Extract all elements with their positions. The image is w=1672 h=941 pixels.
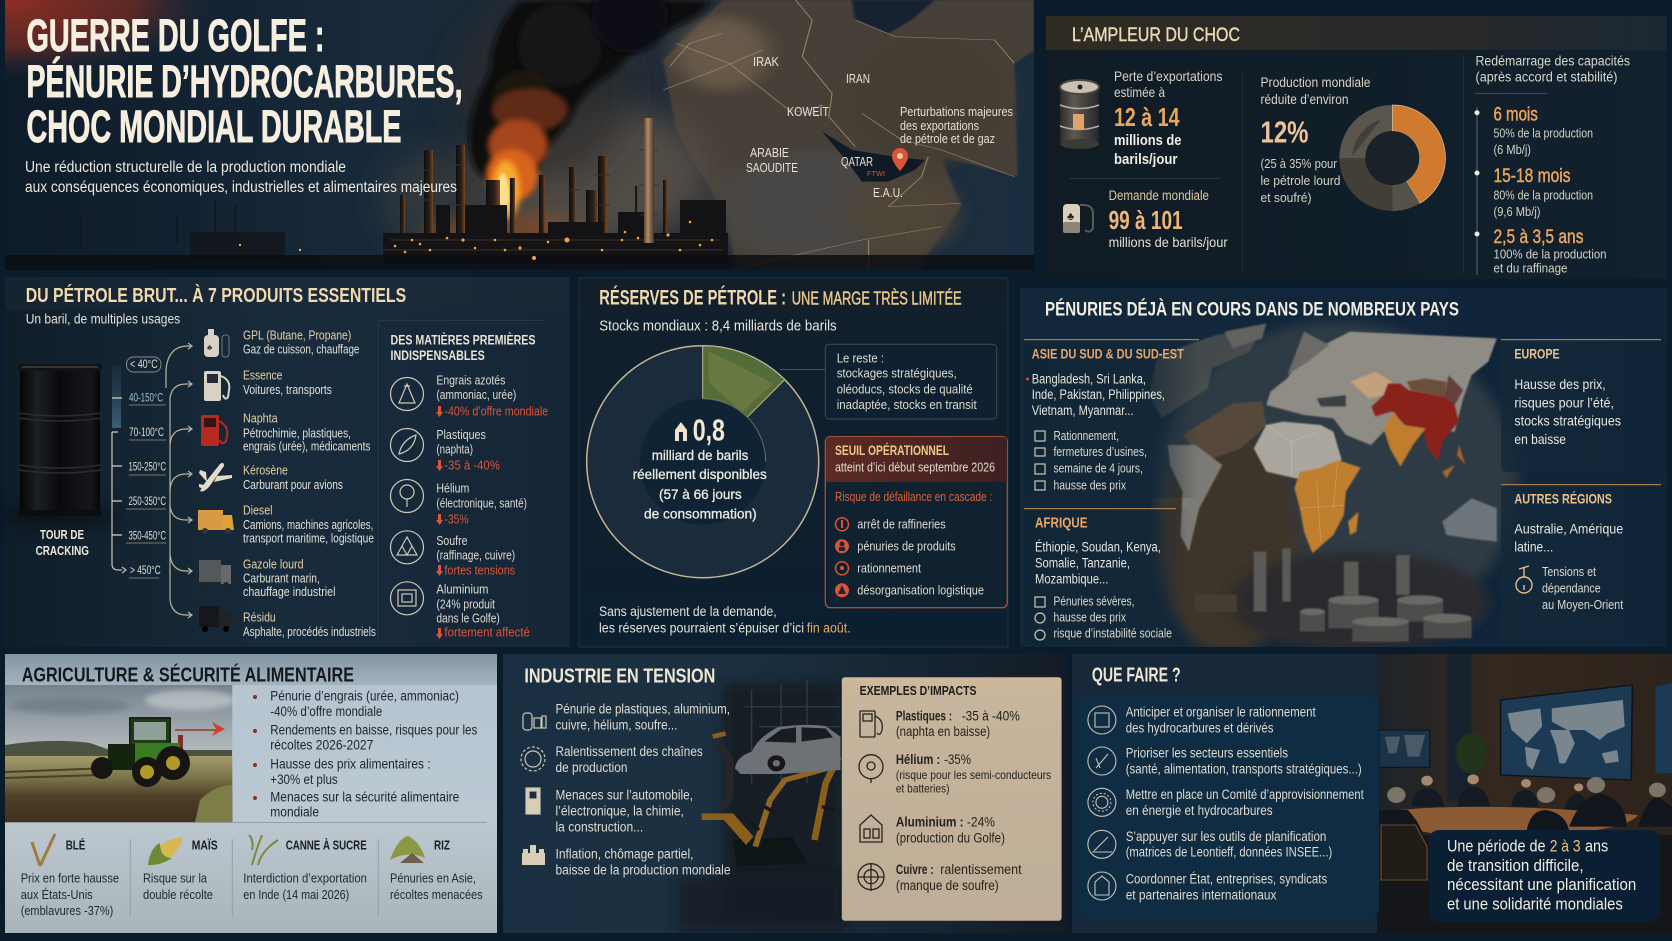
product list: Résidu	[243, 611, 276, 625]
map callout	[900, 105, 1013, 146]
center value: 0,8	[693, 413, 725, 448]
industry list	[556, 701, 730, 877]
impact list: ralentissement	[940, 862, 1022, 877]
region: asie: Inde, Pakistan, Philippines,	[1032, 387, 1165, 402]
action list: en énergie et hydrocarbures	[1126, 803, 1273, 818]
industry list: Pénurie de plastiques, aluminium,	[556, 701, 730, 716]
callout: période de transition: ans	[1585, 838, 1608, 856]
product list: Naphta	[243, 412, 278, 426]
heading: DU PÉTROLE BRUT... À 7 PRODUITS ESSENTIELS	[26, 284, 406, 307]
product list: Voitures, transports	[243, 383, 332, 397]
impact list: (naphta en baisse)	[896, 724, 990, 739]
region: autres régions: Australie, Amérique	[1514, 520, 1623, 536]
heading: QUE FAIRE ?	[1092, 665, 1181, 687]
industry icons	[521, 713, 546, 865]
action list: et partenaires internationaux	[1126, 887, 1277, 902]
panel: du pétrole brut	[0, 277, 570, 647]
crop: canne à sucre: en Inde (14 mai 2026)	[243, 888, 349, 902]
world output: le pétrole lourd	[1260, 173, 1340, 188]
heading: RÉSERVES DE PÉTROLE :	[599, 286, 786, 309]
region: europe	[1501, 339, 1667, 472]
product list: Camions, machines agricoles,	[243, 518, 373, 532]
consequences list: +30% et plus	[270, 772, 338, 787]
product list	[243, 328, 376, 639]
crop: blé: aux États-Unis	[21, 887, 93, 902]
raw material list: Plastiques	[436, 428, 486, 442]
center value: de consommation)	[644, 505, 757, 521]
callout: seuil opérationnel	[825, 437, 1007, 608]
action list: Mettre en place un Comité d’approvisionnement	[1126, 787, 1364, 802]
title: CHOC MONDIAL DURABLE	[26, 101, 402, 152]
action list box	[1075, 697, 1379, 918]
raw material list: (ammoniac, urée)	[436, 388, 516, 402]
impact icons	[858, 711, 884, 891]
icon: naphta red pump	[201, 415, 227, 446]
callout: seuil opérationnel: rationnement	[857, 560, 921, 575]
region: asie: Vietnam, Myanmar...	[1032, 403, 1134, 418]
subtitle: Une réduction structurelle de la production mondiale	[25, 159, 346, 176]
product list: chauffage industriel	[243, 585, 336, 599]
map of the Gulf	[663, 0, 1034, 271]
impact list: Plastiques :	[896, 709, 952, 724]
restart timeline: (après accord et stabilité)	[1476, 70, 1618, 85]
export loss figures: 12 à 14	[1114, 102, 1180, 132]
region: europe: stocks stratégiques	[1514, 413, 1621, 429]
consequences list: -40% d’offre mondiale	[270, 704, 382, 719]
temperature scale: < 40°C	[130, 359, 158, 371]
impact list: -35 à -40%	[962, 709, 1020, 724]
consequences list: Menaces sur la sécurité alimentaire	[270, 790, 459, 805]
region: asie: ASIE DU SUD & DU SUD-EST	[1032, 345, 1184, 361]
impact list: (production du Golfe)	[896, 831, 1005, 846]
region: autres régions: latine...	[1514, 539, 1553, 555]
raw material list: Soufre	[436, 534, 468, 548]
panel: que faire	[1072, 654, 1672, 935]
temperature scale: 70-100°C	[129, 427, 164, 439]
product list: Pétrochimie, plastiques,	[243, 426, 351, 440]
action list: S’appuyer sur les outils de planification	[1126, 829, 1326, 844]
impact examples box: EXEMPLES D’IMPACTS	[860, 683, 977, 698]
map callout: des exportations	[900, 119, 979, 133]
region: autres régions: AUTRES RÉGIONS	[1514, 490, 1612, 506]
industry list: de production	[556, 760, 628, 775]
export loss figures	[1114, 68, 1222, 168]
center value: réellement disponibles	[633, 466, 767, 482]
tower label: CRACKING	[36, 543, 89, 558]
product list: Gaz de cuisson, chauffage	[243, 342, 359, 356]
consequences list: récoltes 2026-2027	[270, 737, 373, 752]
region: europe: Hausse des prix,	[1514, 376, 1606, 392]
region: afrique: Pénuries sévères,	[1054, 595, 1134, 609]
subtitle: aux conséquences économiques, industrielles et alimentaires majeures	[25, 179, 457, 196]
callout: le reste: oléoducs, stocks de qualité	[837, 381, 973, 396]
icon: black truck	[199, 606, 231, 632]
product arrows	[166, 343, 192, 618]
risk icons	[835, 518, 849, 597]
product list: GPL (Butane, Propane)	[243, 328, 351, 342]
action list: des hydrocarbures et dérivés	[1126, 721, 1274, 736]
world output: (25 à 35% pour	[1260, 156, 1338, 171]
restart timeline: 100% de la production	[1494, 247, 1607, 261]
impact list: (risque pour les semi-conducteurs	[896, 768, 1051, 782]
temperature scale: 350-450°C	[128, 530, 166, 542]
red impact figures: -40% d’offre mondiale	[444, 405, 548, 419]
crop: maïs: Risque sur la	[143, 872, 207, 886]
red impact figures: -35%	[444, 513, 469, 527]
industry list: l’électronique, la chimie,	[556, 803, 684, 818]
restart timeline: Redémarrage des capacités	[1476, 54, 1630, 69]
country labels: ARABIE	[750, 146, 789, 160]
country labels: E.A.U.	[873, 186, 903, 200]
heading: INDUSTRIE EN TENSION	[524, 665, 715, 687]
raw materials heading	[390, 332, 536, 363]
product icons	[198, 329, 234, 632]
raw material list: Engrais azotés	[436, 373, 505, 387]
restart timeline: 50% de la production	[1494, 127, 1593, 141]
heading: L’AMPLEUR DU CHOC	[1072, 25, 1240, 46]
industry list: Ralentissement des chaînes	[556, 744, 703, 759]
restart timeline: 15-18 mois	[1494, 166, 1570, 187]
panel: agriculture	[5, 654, 497, 933]
callout: le reste	[825, 344, 997, 419]
heading: AGRICULTURE & SÉCURITÉ ALIMENTAIRE	[22, 664, 354, 687]
industry list: la construction...	[556, 819, 643, 834]
callout: période de transition: Une période de	[1447, 838, 1546, 856]
tower label: TOUR DE	[40, 527, 84, 542]
impact list: -35%	[944, 752, 971, 767]
callout: seuil opérationnel: pénuries de produits	[857, 539, 956, 554]
world output: et soufré)	[1260, 190, 1312, 205]
export loss figures: millions de	[1114, 132, 1182, 149]
region: afrique: hausse des prix	[1054, 611, 1127, 625]
country labels: SAOUDITE	[746, 161, 798, 175]
callout: seuil opérationnel: arrêt de raffineries	[857, 516, 946, 531]
action list: Anticiper et organiser le rationnement	[1126, 705, 1316, 720]
callout: seuil opérationnel: désorganisation logistique	[857, 582, 984, 597]
conclusion: Sans ajustement de la demande,	[599, 604, 777, 619]
subtitle	[25, 159, 457, 196]
region: asie: Bangladesh, Sri Lanka,	[1032, 371, 1146, 386]
region: asie: fermetures d’usines,	[1054, 445, 1147, 459]
raw material list	[436, 373, 527, 625]
raw material list: (raffinage, cuivre)	[436, 548, 515, 562]
region: europe: en baisse	[1514, 431, 1566, 447]
temperature scale: 250-350°C	[128, 496, 166, 508]
raw material list: (24% produit	[436, 597, 495, 611]
region: autres régions	[1501, 484, 1667, 646]
action icons	[1088, 706, 1116, 900]
callout: le reste: Le reste :	[837, 350, 884, 365]
center value	[633, 413, 767, 521]
industry list: baisse de la production mondiale	[556, 862, 730, 877]
refinery silhouette	[5, 118, 1034, 270]
industry list: cuivre, hélium, soufre...	[556, 717, 678, 732]
world output	[1260, 75, 1370, 205]
icon: fuel pump	[1063, 204, 1093, 233]
country labels: IRAN	[846, 72, 870, 86]
panel: hero banner	[5, 0, 1034, 271]
restart timeline: (9,6 Mb/j)	[1494, 205, 1540, 219]
heading: UNE MARGE TRÈS LIMITÉE	[792, 288, 962, 308]
raw materials heading: INDISPENSABLES	[390, 348, 485, 363]
product list: Essence	[243, 368, 282, 382]
region: autres régions: au Moyen-Orient	[1542, 598, 1624, 612]
action list	[1126, 705, 1364, 902]
callout: période de transition: 2 à 3	[1550, 838, 1580, 856]
panel: l'ampleur du choc	[1046, 16, 1667, 279]
country labels: KOWEÏT	[787, 105, 829, 119]
restart timeline: 2,5 à 3,5 ans	[1494, 227, 1584, 248]
crop: maïs: double récolte	[143, 888, 213, 902]
icon: grey truck	[199, 560, 231, 588]
heading: PÉNURIES DÉJÀ EN COURS DANS DE NOMBREUX PAYS	[1045, 298, 1459, 321]
title	[26, 10, 462, 152]
product list: transport maritime, logistique	[243, 532, 374, 546]
region: asie: hausse des prix	[1054, 478, 1127, 492]
temperature scale: 150-250°C	[128, 462, 166, 474]
panel: industrie en tension	[503, 654, 1067, 933]
center value: (57 à 66 jours	[659, 486, 742, 502]
icon: oil barrel	[1060, 80, 1099, 149]
callout: seuil opérationnel: SEUIL OPÉRATIONNEL	[835, 442, 949, 458]
action list: (matrices de Leontieff, données INSEE...)	[1126, 845, 1332, 860]
world output: 12%	[1260, 115, 1308, 150]
crop: riz: Pénuries en Asie,	[390, 872, 476, 886]
icon: plane	[199, 463, 232, 492]
action list: Prioriser les secteurs essentiels	[1126, 746, 1288, 761]
crop: blé: BLÉ	[66, 837, 85, 852]
crop: blé	[21, 834, 119, 918]
impact list: Aluminium :	[896, 815, 964, 830]
crop: canne à sucre: CANNE À SUCRE	[286, 837, 367, 852]
red impact figures: fortes tensions	[444, 563, 515, 577]
restart timeline: 6 mois	[1494, 105, 1538, 126]
impact list: (manque de soufre)	[896, 878, 999, 893]
map callout: de pétrole et de gaz	[900, 132, 995, 146]
crop: maïs: MAÏS	[192, 837, 218, 852]
country labels: QATAR	[841, 155, 873, 169]
region: afrique: Somalie, Tanzanie,	[1035, 556, 1130, 571]
red impact figures: fortement affecté	[444, 626, 530, 640]
refinery tanks	[1195, 548, 1472, 642]
restart timeline: (6 Mb/j)	[1494, 143, 1531, 157]
raw material list: dans le Golfe)	[436, 611, 500, 625]
product list: Carburant pour avions	[243, 478, 343, 492]
barrel	[0, 364, 120, 530]
title: GUERRE DU GOLFE :	[26, 10, 324, 61]
action list: Coordonner État, entreprises, syndicats	[1126, 871, 1327, 886]
raw material list: (électronique, santé)	[436, 497, 527, 511]
country labels	[746, 55, 903, 200]
red impact figures: -35 à -40%	[444, 458, 500, 472]
action list: (santé, alimentation, transports stratégiques...)	[1126, 761, 1362, 776]
global demand	[1109, 188, 1228, 250]
product list: engrais (urée), médicaments	[243, 440, 370, 454]
region: europe: EUROPE	[1514, 345, 1560, 361]
consequences list: Rendements en baisse, risques pour les	[270, 722, 478, 737]
raw material list: (naphta)	[436, 442, 473, 456]
industry list: Menaces sur l’automobile,	[556, 787, 693, 802]
region: afrique: Éthiopie, Soudan, Kenya,	[1035, 540, 1161, 555]
export loss figures: barils/jour	[1114, 151, 1178, 168]
export loss figures: Perte d’exportations	[1114, 68, 1222, 84]
title: PÉNURIE D’HYDROCARBURES,	[26, 56, 462, 107]
raw material list: Aluminium	[436, 582, 488, 596]
global demand: 99 à 101	[1109, 205, 1183, 235]
conclusion	[599, 604, 851, 636]
crop: blé: Prix en forte hausse	[21, 872, 119, 886]
consequences list: mondiale	[270, 805, 319, 820]
country labels: FTWI	[867, 171, 885, 178]
callout: période de transition	[1429, 830, 1660, 922]
subheading: Un baril, de multiples usages	[26, 310, 180, 326]
region: autres régions: Tensions et	[1542, 565, 1596, 579]
impact list	[896, 709, 1051, 893]
icon: gas bottle	[204, 329, 229, 357]
crop: canne à sucre	[243, 835, 367, 902]
crop: blé: (emblavures -37%)	[21, 904, 113, 918]
region: afrique: Mozambique...	[1035, 571, 1108, 586]
region: europe: risques pour l’été,	[1514, 394, 1614, 410]
icon: essence fuel pump	[204, 371, 229, 401]
callout: période de transition: de transition difficile,	[1447, 857, 1584, 875]
callout: le reste: stockages stratégiques,	[837, 366, 957, 381]
region: asie	[1024, 339, 1199, 498]
tractor photo	[5, 685, 235, 822]
tower label	[36, 527, 89, 558]
raw material icons	[390, 378, 424, 615]
impact list: et batteries)	[896, 782, 950, 796]
panel: réserves de pétrole	[579, 278, 1008, 647]
country labels: IRAK	[753, 55, 780, 69]
conclusion: fin août.	[807, 621, 851, 636]
product list: Gazole lourd	[243, 557, 304, 571]
conclusion: les réserves pourraient s’épuiser d’ici	[599, 621, 804, 636]
region: afrique	[1024, 508, 1189, 646]
stocks line: Stocks mondiaux : 8,4 milliards de barils	[599, 318, 837, 335]
temperature scale: > 450°C	[130, 565, 161, 577]
icon: orange truck	[198, 510, 234, 534]
callout: le reste: inadaptée, stocks en transit	[837, 397, 977, 412]
region: afrique: risque d’instabilité sociale	[1054, 627, 1172, 641]
icon: fuel pump: ♣	[1067, 211, 1074, 223]
region: afrique: AFRIQUE	[1035, 515, 1088, 532]
raw materials heading: DES MATIÈRES PREMIÈRES	[390, 332, 536, 347]
crop: riz: RIZ	[434, 838, 450, 852]
reserves donut	[587, 346, 819, 578]
callout: seuil opérationnel: atteint d’ici début septembre 2026	[835, 461, 995, 475]
industry list: Inflation, chômage partiel,	[556, 846, 694, 861]
world output: réduite d’environ	[1260, 92, 1348, 107]
crop: riz	[390, 836, 483, 902]
temperature scale	[112, 357, 166, 578]
factory illustration	[678, 680, 844, 933]
callout: période de transition: nécessitant une planification	[1447, 876, 1636, 894]
product list: Kérosène	[243, 463, 288, 477]
crop: riz: récoltes menacées	[390, 888, 483, 902]
restart timeline: et du raffinage	[1494, 261, 1568, 275]
map callout: Perturbations majeures	[900, 105, 1013, 119]
product list: Diesel	[243, 503, 272, 517]
restart timeline	[1474, 54, 1630, 275]
restart timeline: 80% de la production	[1494, 188, 1593, 202]
impact list: Hélium :	[896, 752, 940, 767]
icon: gas bottle: ♣	[207, 343, 213, 352]
meeting room photo	[1377, 654, 1672, 935]
consequences list: Hausse des prix alimentaires :	[270, 756, 431, 771]
red impact figures	[436, 405, 548, 640]
temperature scale: 40-150°C	[129, 393, 163, 405]
smoke and fire	[380, 0, 710, 255]
product list: Asphalte, procédés industriels	[243, 625, 376, 639]
center value: milliard de barils	[652, 447, 748, 463]
crop: canne à sucre: Interdiction d’exportation	[243, 872, 367, 886]
impact list: -24%	[967, 815, 995, 830]
callout: seuil opérationnel: Risque de défaillance en cascade :	[835, 490, 992, 504]
crop: maïs	[143, 837, 218, 902]
region: asie: semaine de 4 jours,	[1054, 461, 1143, 475]
global demand: millions de barils/jour	[1109, 234, 1228, 250]
impact list: Cuivre :	[896, 862, 934, 877]
world output: Production mondiale	[1260, 75, 1370, 90]
label: pin	[892, 148, 908, 171]
region: autres régions: dépendance	[1542, 581, 1601, 595]
world map	[1149, 322, 1518, 655]
donut chart	[1339, 105, 1445, 211]
impact examples box	[842, 677, 1062, 921]
export loss figures: estimée à	[1114, 84, 1165, 100]
global demand: Demande mondiale	[1109, 188, 1209, 203]
raw material list: Hélium	[436, 482, 469, 496]
consequences list: Pénurie d’engrais (urée, ammoniac)	[270, 689, 459, 704]
region: asie: Rationnement,	[1054, 429, 1119, 443]
product list: Carburant marin,	[243, 571, 320, 585]
callout: période de transition: et une solidarité mondiales	[1447, 895, 1623, 913]
consequences list	[253, 689, 478, 820]
panel: pénuries déjà en cours	[1020, 288, 1667, 655]
